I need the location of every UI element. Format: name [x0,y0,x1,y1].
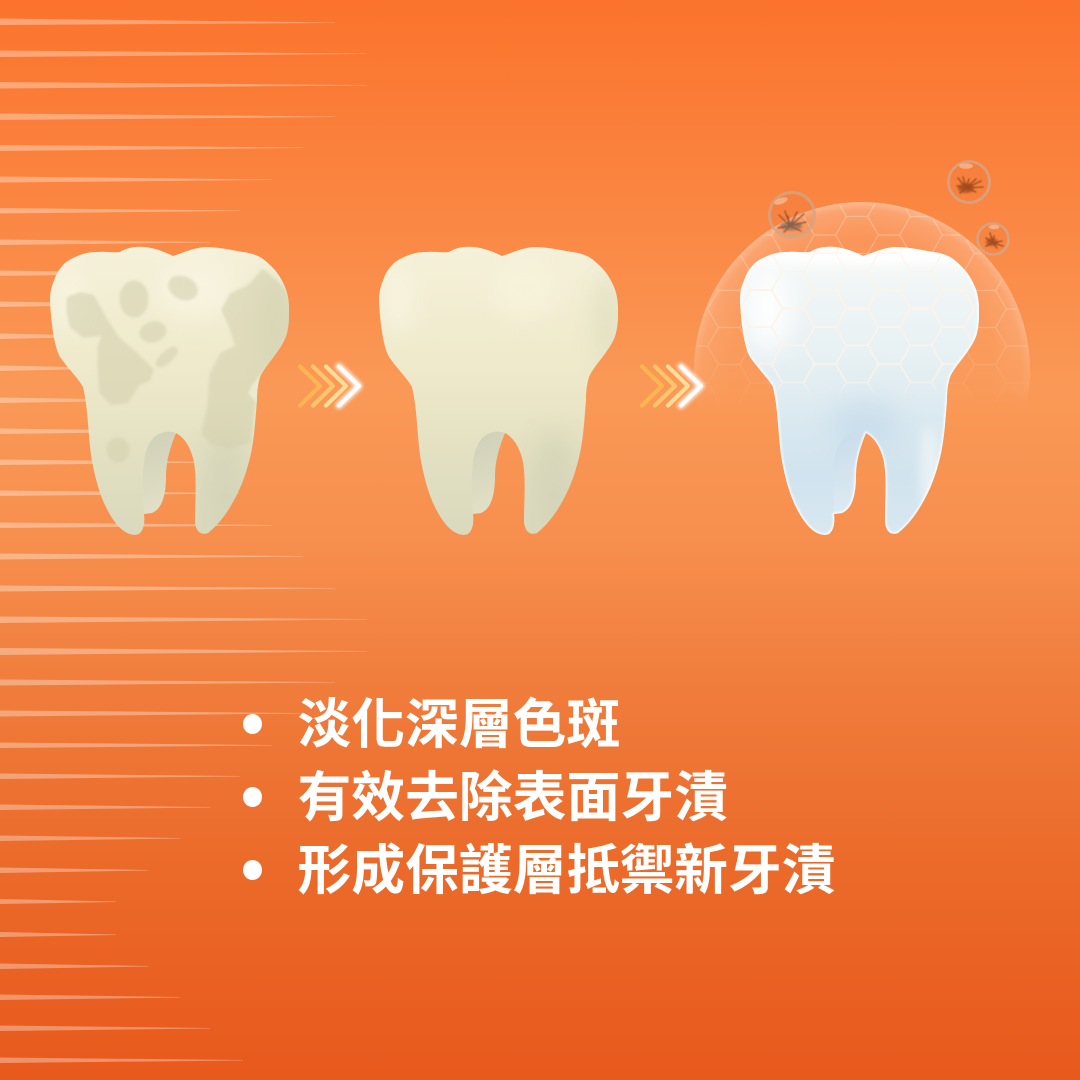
arrow: second to third tooth [642,366,701,406]
tooth 3: whitened with honeycomb shield [740,246,979,535]
protective dome [694,202,1030,398]
bubble: bacteria lower right [978,224,1008,254]
arrow: first to second tooth [300,366,359,406]
bubble: bacteria on dome [770,192,814,238]
speed lines [0,18,367,1063]
bullet: remove surface stains: 有效去除表面牙漬 [298,768,728,828]
bullet: fade deep stains: 淡化深層色斑 [298,694,620,754]
tooth 2: yellowed [379,247,621,535]
bubble: bacteria upper right [948,162,990,202]
bullet: form protective layer: 形成保護層抵禦新牙漬 [298,840,835,900]
tooth 1: stained [50,247,292,535]
